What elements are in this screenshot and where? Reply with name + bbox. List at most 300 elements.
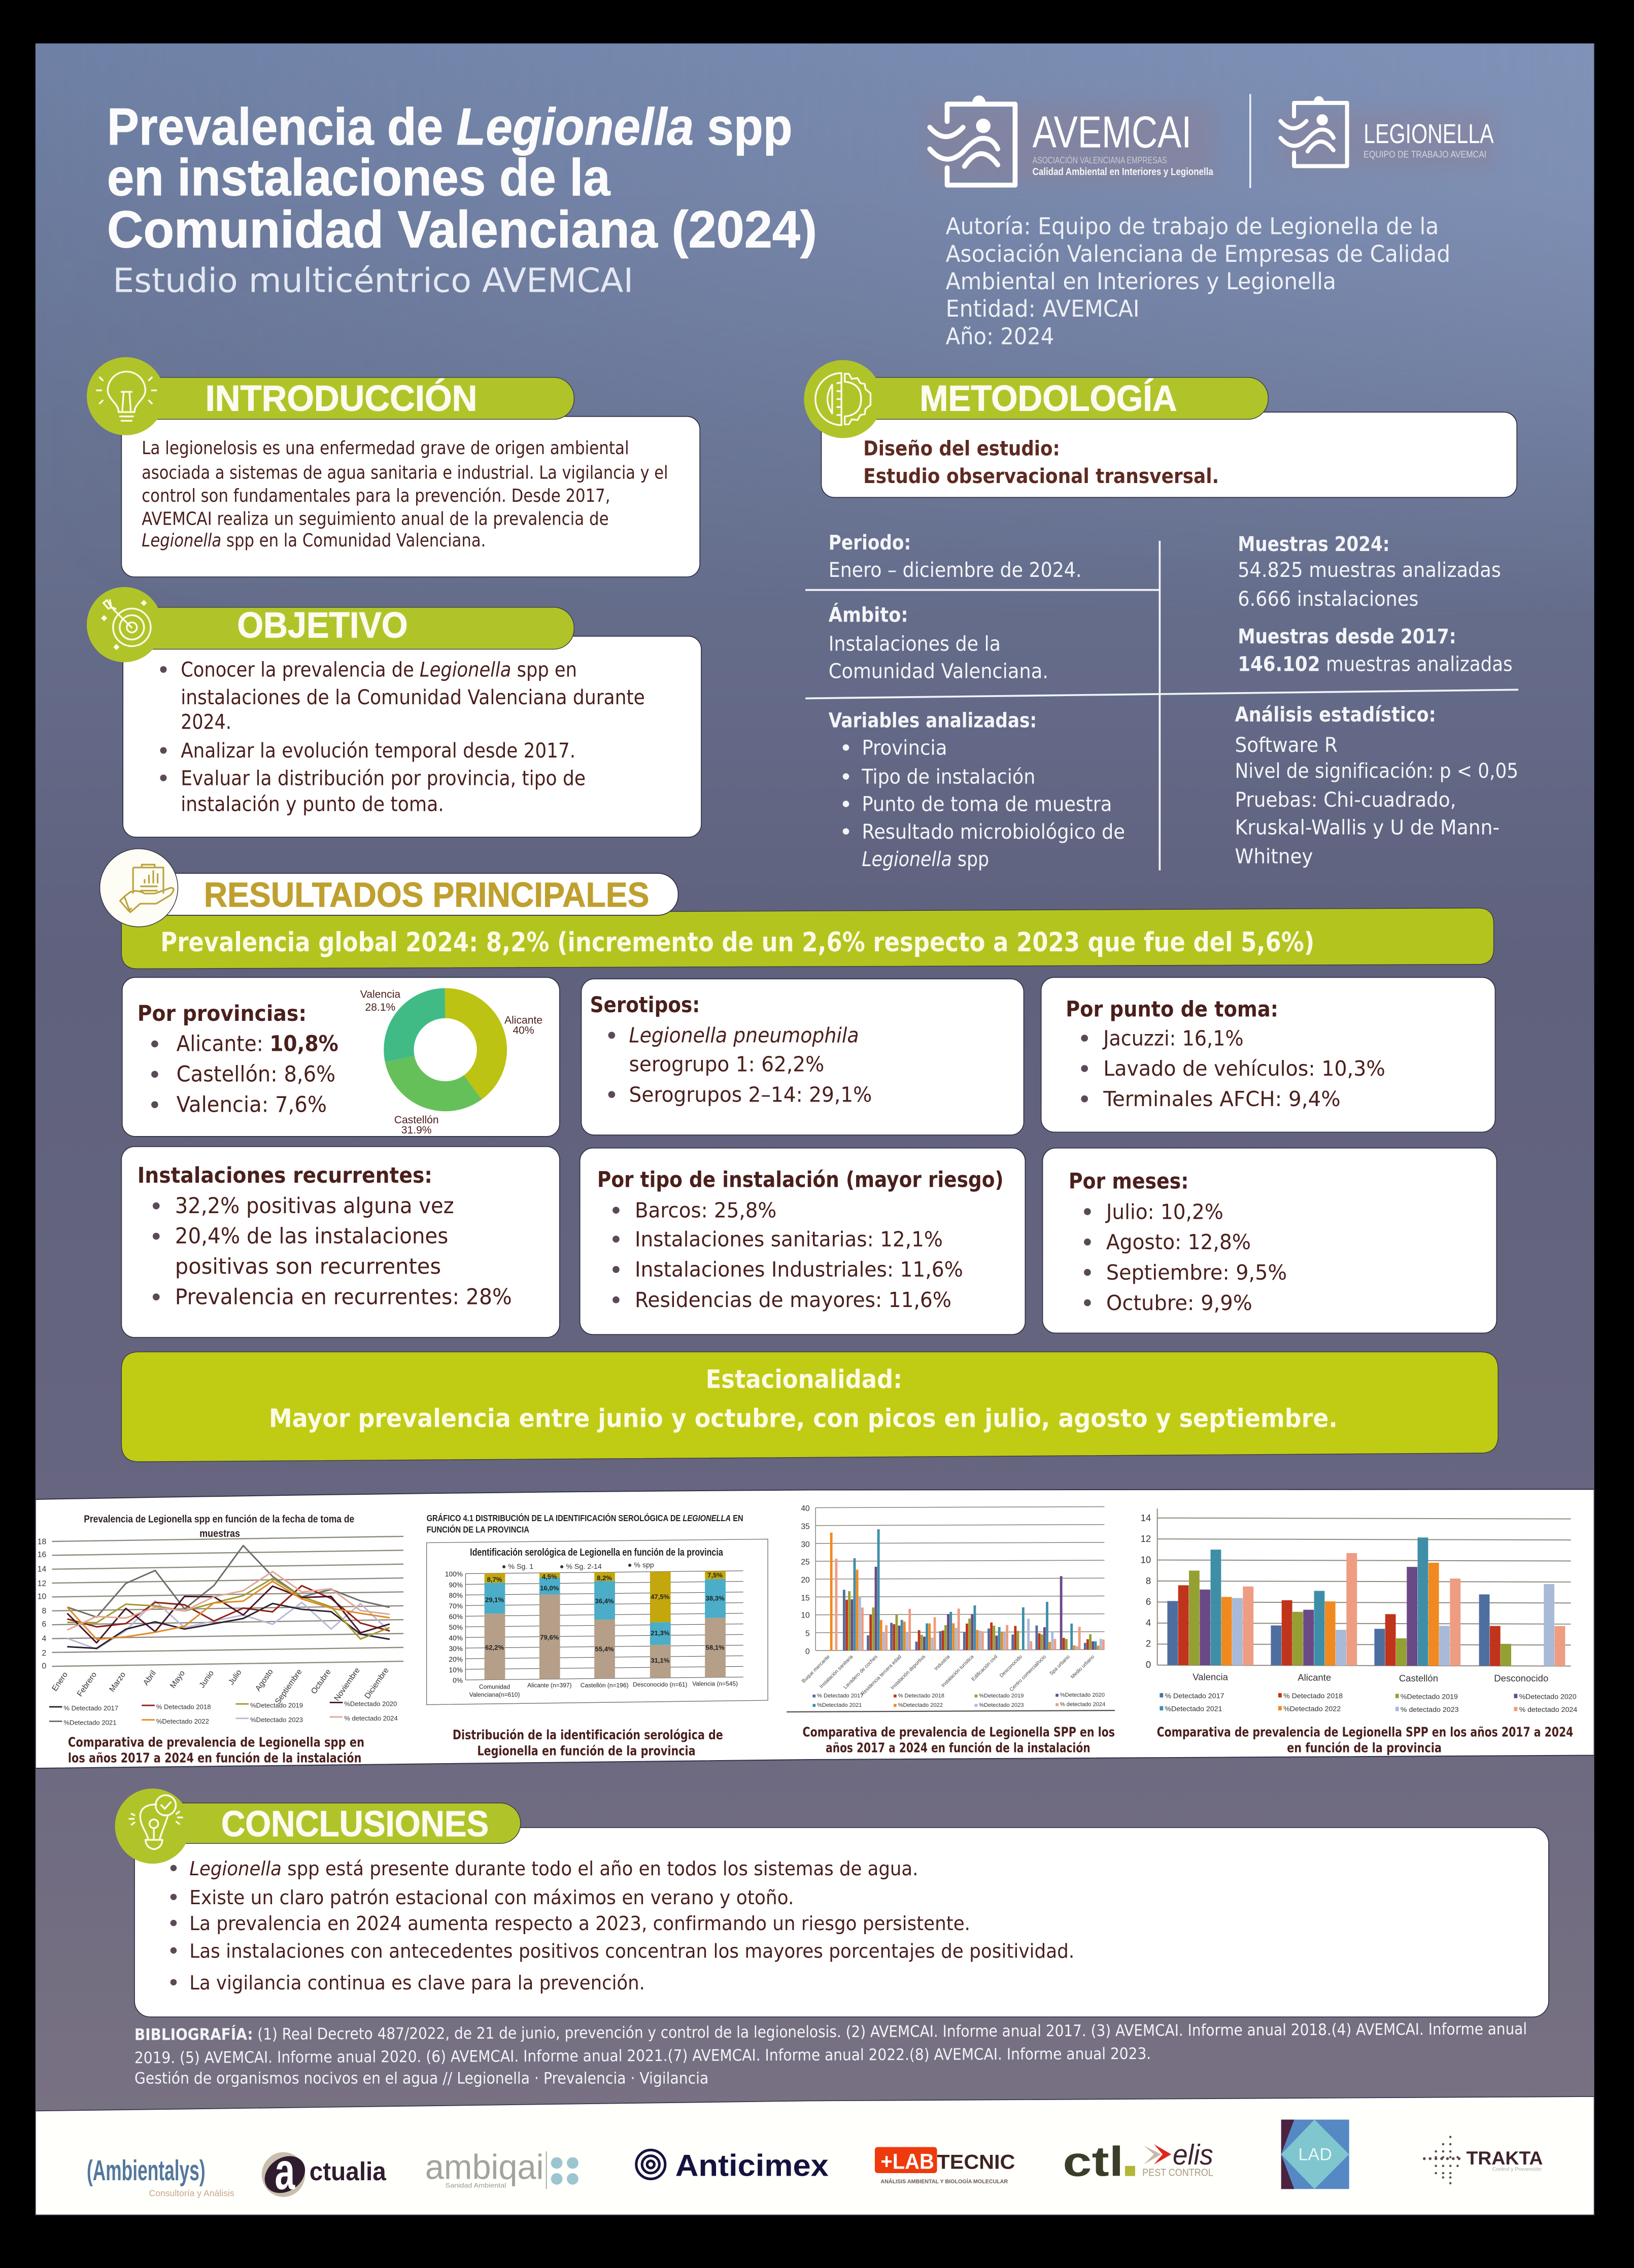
chart 1 axis labels: 12 — [38, 1579, 46, 1588]
chart 1 axis labels: Octubre — [310, 1667, 333, 1696]
chart 3 category labels: Edificación civil — [971, 1654, 999, 1682]
objective heading ribbon — [126, 607, 574, 649]
card: por punto de toma: Lavado de vehículos: 10,3% — [1103, 1056, 1385, 1081]
conclusions list: Las instalaciones con antecedentes positivos concentran los mayores porcentajes de positividad. — [189, 1940, 1074, 1963]
logo: Elis pest control: PEST CONTROL — [1142, 2168, 1213, 2179]
chart 3 category labels: Lavadero de coches — [843, 1654, 879, 1690]
logo: Anticimex: Anticimex — [675, 2149, 829, 2183]
icon: bulb with check — [115, 1789, 190, 1864]
block: ámbito: Comunidad Valenciana. — [829, 660, 1048, 683]
chart 2 value labels: 62,2% — [485, 1643, 504, 1651]
chart 2 axes labels: 80% — [449, 1592, 463, 1599]
chart 2 axes labels: 70% — [449, 1602, 463, 1610]
chart 2 legend: ● % Sg. 2-14 — [560, 1563, 602, 1571]
card: por tipo de instalación: Instalaciones Industriales: 11,6% — [635, 1257, 963, 1282]
chart 1 plot lines — [52, 1536, 403, 1666]
conclusions list: La prevalencia en 2024 aumenta respecto a 2023, confirmando un riesgo persistente. — [189, 1912, 970, 1935]
chart 3 category labels — [801, 1654, 1096, 1697]
chart 2 value labels: 16,0% — [540, 1585, 559, 1592]
objective list — [160, 659, 645, 816]
chart 2 value labels — [485, 1571, 725, 1664]
donut chart: provincias: 28.1% — [365, 1002, 395, 1013]
subtitle: Estudio multicéntrico AVEMCAI — [113, 262, 633, 300]
chart 1 legend: %Detectado 2019 — [250, 1701, 303, 1709]
chart 2 value labels: 58,1% — [706, 1643, 725, 1651]
banner: estacionalidad: Mayor prevalencia entre junio y octubre, con picos en julio, agosto y septiembre. — [269, 1404, 1338, 1433]
chart 1 axis labels: Febrero — [76, 1670, 98, 1698]
chart 1 legend: % detectado 2024 — [344, 1714, 398, 1722]
chart 4 axis labels: 12 — [1141, 1533, 1151, 1544]
logo: Ambientalys: (Ambientalys) — [87, 2154, 206, 2187]
card: por meses: Septiembre: 9,5% — [1106, 1260, 1287, 1285]
card: instalaciones recurrentes: 32,2% positivas alguna vez — [175, 1193, 454, 1219]
logo: AVEMCAI: ASOCIACIÓN VALENCIANA EMPRESAS — [1033, 155, 1167, 165]
chart 4 legend: %Detectado 2021 — [1165, 1705, 1222, 1713]
logo: AVEMCAI: AVEMCAI — [1033, 107, 1192, 157]
chart 1 axis labels: Diciembre — [363, 1666, 391, 1700]
card: por tipo de instalación: Barcos: 25,8% — [635, 1198, 776, 1222]
logo: LAD: LAD — [1298, 2145, 1332, 2164]
block: muestras: 6.666 instalaciones — [1238, 588, 1418, 611]
panel: metodología — [804, 360, 1517, 497]
logo: Elis pest control: elis — [1173, 2139, 1213, 2171]
objective text panel — [123, 636, 701, 837]
chart 3 legend: %Detectado 2022 — [898, 1702, 943, 1708]
card: serotipos: Serogrupos 2–14: 29,1% — [629, 1082, 872, 1107]
block: ámbito: Ámbito: — [829, 603, 908, 627]
chart 3 legend: % Detectado 2017 — [817, 1693, 863, 1699]
logo: AVEMCAI: Calidad Ambiental en Interiores y Legionella — [1033, 166, 1213, 178]
chart 4 axis labels: 10 — [1141, 1554, 1151, 1565]
bar chart: prevalence by province — [1141, 1508, 1577, 1714]
card: serotipos: Serotipos: — [590, 992, 700, 1018]
logo: LabTecnic: TECNIC — [937, 2151, 1015, 2173]
intro paragraph: La legionelosis es una enfermedad grave de origen ambiental — [142, 438, 629, 459]
intro paragraph: asociada a sistemas de agua sanitaria e industrial. La vigilancia y el — [142, 462, 668, 483]
title: Comunidad Valenciana (2024) — [107, 200, 817, 258]
bibliography: Gestión de organismos nocivos en el agua // Legionella · Prevalencia · Vigilancia — [134, 2069, 708, 2087]
donut chart: provincias: Valencia — [360, 988, 400, 1000]
logo: ctl — [1063, 2138, 1135, 2185]
block: análisis estadístico: Pruebas: Chi-cuadrado, — [1235, 788, 1456, 812]
card: instalaciones recurrentes: Instalaciones recurrentes: — [138, 1163, 432, 1188]
block: periodo: Enero – diciembre de 2024. — [829, 559, 1081, 582]
block: variables analizadas: Tipo de instalación — [861, 766, 1035, 789]
logo: Legionella: EQUIPO DE TRABAJO AVEMCAI — [1364, 149, 1486, 160]
card: por provincias: Alicante: 10,8% — [177, 1032, 338, 1057]
chart 1 title: muestras — [199, 1528, 240, 1539]
chart 2 value labels: 38,3% — [706, 1595, 725, 1602]
block: análisis estadístico: Kruskal-Wallis y U de Mann- — [1235, 816, 1500, 839]
chart 4 category labels: Valencia — [1193, 1671, 1229, 1682]
chart 2 axes labels: Alicante (n=397) — [527, 1682, 572, 1689]
banner: prevalencia global: Prevalencia global 2024: 8,2% (incremento de un 2,6% respecto a 2023 que fue del 5,6%) — [160, 927, 1314, 958]
chart 2 value labels: 79,6% — [540, 1633, 559, 1641]
chart 3 legend: % detectado 2024 — [1060, 1702, 1105, 1708]
bibliography — [134, 2019, 1527, 2087]
chart 4 category labels: Alicante — [1298, 1672, 1331, 1683]
logo: Legionella — [1280, 96, 1496, 170]
chart 1 axis labels: 16 — [38, 1551, 46, 1559]
chart 4 legend: %Detectado 2022 — [1283, 1705, 1341, 1713]
chart 3 category labels: Desconocido — [999, 1654, 1024, 1679]
chart 2 value labels: 29,1% — [485, 1596, 504, 1603]
chart 3 axis labels: 30 — [801, 1540, 810, 1549]
chart 3 legend: %Detectado 2023 — [979, 1702, 1024, 1708]
chart 3 category labels: Buque mercante — [801, 1654, 831, 1685]
conclusions list: Existe un claro patrón estacional con máximos en verano y otoño. — [189, 1886, 794, 1909]
panel: objetivo — [87, 587, 701, 837]
block: ámbito: Instalaciones de la — [829, 632, 1001, 656]
study design — [863, 437, 1219, 488]
objective list: instalaciones de la Comunidad Valenciana durante — [181, 686, 645, 709]
chart 2 value labels: 55,4% — [595, 1645, 614, 1653]
chart 2 axes labels: 90% — [449, 1581, 463, 1589]
chart 1 axis labels: Enero — [50, 1670, 70, 1693]
logo: actualia: ctualia — [310, 2157, 386, 2186]
design text panel — [822, 412, 1517, 497]
chart 2 legend — [502, 1561, 654, 1571]
logo: LabTecnic: +LAB — [880, 2149, 934, 2174]
chart 1 axis labels: Agosto — [254, 1667, 275, 1693]
donut chart: provincias — [360, 988, 542, 1136]
chart 4 legend: %Detectado 2020 — [1519, 1693, 1577, 1701]
chart 1 axis labels: 18 — [38, 1537, 46, 1546]
logo: LAD — [1281, 2120, 1349, 2189]
chart 1 axis labels: 0 — [42, 1662, 46, 1670]
block: variables analizadas: Provincia — [862, 737, 947, 760]
white charts band — [36, 1489, 1594, 1768]
chart 3 axis labels: 20 — [801, 1576, 810, 1585]
chart 2 value labels: 8,7% — [487, 1576, 502, 1584]
banner: prevalencia global — [121, 908, 1494, 969]
chart 4 axis labels: 14 — [1141, 1513, 1151, 1523]
chart 1 axis labels: 14 — [38, 1565, 46, 1574]
chart 3 caption: Comparativa de prevalencia de Legionella SPP en los — [803, 1725, 1115, 1740]
logo: Legionella: LEGIONELLA — [1364, 119, 1494, 149]
chart 2 axes labels: Castellón (n=196) — [581, 1682, 628, 1689]
resultados heading — [100, 849, 678, 927]
card: por punto de toma: Jacuzzi: 16,1% — [1102, 1026, 1244, 1050]
title: Prevalencia de Legionella spp — [107, 97, 793, 156]
logo: ambiqai: Sanidad Ambiental — [446, 2181, 506, 2189]
chart 2 heading: GRÁFICO 4.1 DISTRIBUCIÓN DE LA IDENTIFICACIÓN SEROLÓGICA DE LEGIONELLA EN — [427, 1514, 743, 1523]
chart 4 legend: % detectado 2023 — [1401, 1706, 1459, 1714]
chart 2 heading: FUNCIÓN DE LA PROVINCIA — [427, 1525, 529, 1535]
block: análisis estadístico: Software R — [1235, 734, 1338, 757]
intro paragraph: control son fundamentales para la prevención. Desde 2017, — [142, 486, 610, 506]
chart 4 axis labels: 4 — [1146, 1617, 1151, 1628]
chart 3 legend: %Detectado 2020 — [1060, 1692, 1105, 1698]
chart 4 legend — [1160, 1692, 1577, 1714]
chart 2 value labels: 8,2% — [597, 1574, 612, 1582]
chart 3 axis labels — [801, 1504, 810, 1656]
block: ámbito — [829, 603, 1048, 683]
intro text panel — [121, 417, 700, 577]
intro paragraph: AVEMCAI realiza un seguimiento anual de la prevalencia de — [142, 508, 609, 529]
chart 1 title — [84, 1514, 354, 1539]
chart 2 value labels: 36,4% — [595, 1597, 614, 1605]
chart 2 axes labels: 30% — [449, 1645, 463, 1653]
logo: actualia — [258, 2142, 386, 2201]
card: por tipo de instalación: Instalaciones sanitarias: 12,1% — [635, 1227, 943, 1251]
chart 1 axis labels: Marzo — [108, 1670, 127, 1694]
chart 1 axis labels: Noviembre — [332, 1666, 362, 1703]
chart 3 caption: años 2017 a 2024 en función de la instalación — [826, 1741, 1091, 1756]
chart 3 axis labels: 40 — [801, 1504, 810, 1513]
intro heading: INTRODUCCIÓN — [206, 379, 477, 419]
chart 3 category labels: Medio urbano — [1070, 1654, 1096, 1680]
card: por provincias: Castellón: 8,6% — [177, 1062, 335, 1087]
card: por meses: Octubre: 9,9% — [1106, 1291, 1252, 1315]
chart 3 axis labels: 0 — [805, 1647, 810, 1656]
methodology heading: METODOLOGÍA — [920, 379, 1177, 419]
chart 3 legend: % Detectado 2018 — [898, 1693, 944, 1699]
chart 2 frame — [427, 1539, 768, 1705]
chart 1 axis labels: 8 — [42, 1607, 46, 1616]
logo: AVEMCAI — [926, 95, 1215, 185]
block: variables analizadas: Variables analizadas: — [829, 709, 1037, 732]
card: serotipos: Legionella pneumophila — [629, 1023, 859, 1048]
chart 2 value labels: 47,5% — [651, 1593, 670, 1601]
logo: Ambientalys: Consultoría y Análisis — [149, 2189, 234, 2198]
chart 1 axis labels: Junio — [198, 1669, 216, 1690]
authorship block: Ambiental en Interiores y Legionella — [946, 268, 1336, 295]
chart 4 caption: en función de la provincia — [1287, 1741, 1442, 1756]
chart 2 axes labels: 60% — [449, 1613, 463, 1621]
card: por tipo de instalación — [580, 1148, 1025, 1334]
chart 2 axes labels: 20% — [449, 1656, 463, 1663]
donut chart: provincias: 31.9% — [401, 1124, 432, 1136]
icon: gear and brain — [804, 360, 882, 438]
logo: actualia: a — [275, 2142, 295, 2200]
chart 4 category labels: Castellón — [1399, 1673, 1438, 1683]
conclusions list: Legionella spp está presente durante todo el año en todos los sistemas de agua. — [189, 1858, 918, 1880]
chart 4 category labels — [1193, 1671, 1548, 1683]
chart 4 category labels: Desconocido — [1494, 1673, 1548, 1683]
line chart: prevalence by month — [38, 1514, 403, 1727]
chart 2 caption — [453, 1728, 723, 1759]
icon: target — [87, 587, 162, 662]
card: por meses — [1043, 1148, 1496, 1333]
chart 2 legend: ● % spp — [628, 1561, 654, 1569]
block: muestras: Muestras desde 2017: — [1238, 625, 1456, 648]
chart 3 legend: %Detectado 2021 — [817, 1702, 862, 1708]
block: variables analizadas: Resultado microbiológico de — [862, 820, 1125, 844]
block: análisis estadístico — [1235, 703, 1518, 868]
chart 3 axis labels: 5 — [805, 1629, 810, 1638]
chart 3 category labels: Instalación sanitaria — [819, 1654, 855, 1690]
chart 3 category labels: Instalación turística — [940, 1654, 975, 1689]
intro paragraph — [142, 438, 668, 551]
methodology heading ribbon — [843, 377, 1268, 419]
chart 1 title: Prevalencia de Legionella spp en función de la fecha de toma de — [84, 1514, 354, 1525]
logo: Trakta: TRAKTA — [1466, 2147, 1543, 2169]
chart 2 axes labels: 0% — [453, 1677, 463, 1685]
chart 1 axis labels — [38, 1537, 391, 1706]
donut chart: provincias: Castellón — [394, 1114, 439, 1126]
logo: LabTecnic — [875, 2147, 1015, 2185]
authorship block: Autoría: Equipo de trabajo de Legionella de la — [946, 213, 1439, 240]
results heading text: RESULTADOS PRINCIPALES — [204, 876, 649, 914]
chart 2 axes labels: Valencia (n=545) — [692, 1680, 738, 1688]
chart 3 category labels: Industria — [933, 1654, 951, 1672]
block: análisis estadístico: Análisis estadístico: — [1235, 703, 1436, 727]
intro heading ribbon — [126, 377, 574, 419]
chart 2 axes labels: Desconocido (n=61) — [633, 1681, 687, 1688]
study design: Diseño del estudio: — [863, 437, 1060, 461]
bar chart: prevalence by installation — [787, 1504, 1115, 1712]
chart 3 category labels: Spa urbano — [1049, 1654, 1071, 1676]
panel: introducción — [87, 357, 700, 577]
chart 4 legend: % Detectado 2018 — [1283, 1692, 1343, 1700]
title: en instalaciones de la — [107, 148, 610, 207]
block: variables analizadas: Punto de toma de muestra — [862, 793, 1112, 816]
chart 2 axes labels: 50% — [449, 1624, 463, 1631]
card: por provincias: Valencia: 7,6% — [177, 1092, 327, 1117]
methodology grid lines — [805, 541, 1518, 871]
chart 1 axis labels: 6 — [42, 1620, 46, 1629]
chart 3 axis labels: 35 — [801, 1522, 810, 1531]
chart 2 bars — [466, 1571, 743, 1680]
chart 4 axis labels: 2 — [1146, 1638, 1151, 1649]
authorship block: Asociación Valenciana de Empresas de Calidad — [946, 240, 1450, 267]
chart 2 inner title: Identificación serológica de Legionella en función de la provincia — [470, 1547, 724, 1558]
chart 1 legend: % Detectado 2018 — [156, 1703, 211, 1710]
chart 1 axis labels: Julio — [227, 1668, 244, 1687]
chart 3 axis labels: 15 — [801, 1594, 810, 1603]
conclusions list: La vigilancia continua es clave para la prevención. — [189, 1972, 645, 1995]
block: variables analizadas — [829, 709, 1125, 871]
chart 4 legend: %Detectado 2019 — [1401, 1693, 1458, 1701]
icon: clipboard in hand — [100, 849, 178, 927]
chart 4 axis labels: 6 — [1146, 1596, 1151, 1607]
bibliography: 2019. (5) AVEMCAI. Informe anual 2020. (6) AVEMCAI. Informe anual 2021.(7) AVEMCAI. Informe anual 2022.(8) AVEMCAI. Informe anual 2023. — [134, 2045, 1151, 2067]
block: muestras: 146.102 muestras analizadas — [1238, 652, 1513, 676]
card: por meses: Agosto: 12,8% — [1106, 1230, 1251, 1254]
chart 3 axis labels: 25 — [801, 1558, 810, 1566]
chart 1 legend: % Detectado 2017 — [63, 1704, 118, 1712]
chart 2 axes labels: Valenciana(n=610) — [469, 1691, 520, 1698]
chart 2 axes labels — [445, 1570, 738, 1698]
card: serotipos — [582, 979, 1024, 1135]
title — [107, 97, 817, 258]
logo: ctl: ctl — [1063, 2138, 1124, 2185]
chart 3 category labels: Centro comercial/ocio — [1009, 1654, 1047, 1693]
card: por provincias — [122, 977, 560, 1137]
conclusions heading ribbon — [155, 1803, 521, 1843]
chart 1 legend: %Detectado 2020 — [344, 1700, 397, 1708]
block: muestras: Muestras 2024: — [1238, 533, 1389, 556]
stacked bar chart: serología — [427, 1514, 768, 1705]
card: por tipo de instalación: Residencias de mayores: 11,6% — [635, 1288, 951, 1312]
logo: LabTecnic: ANÁLISIS AMBIENTAL Y BIOLOGÍA MOLECULAR — [880, 2178, 1008, 2185]
chart 2 value labels: 31,1% — [651, 1657, 670, 1664]
donut chart: provincias: Alicante — [504, 1015, 542, 1026]
block: variables analizadas: Legionella spp — [862, 848, 989, 871]
block: análisis estadístico: Nivel de significación: p < 0,05 — [1235, 760, 1518, 783]
chart 2 caption: Legionella en función de la provincia — [477, 1743, 696, 1759]
chart 1 legend: %Detectado 2023 — [250, 1716, 303, 1724]
logo: Trakta — [1423, 2136, 1543, 2184]
chart 3 category labels: Residencia tercera edad — [860, 1654, 903, 1697]
banner: estacionalidad: Estacionalidad: — [706, 1365, 902, 1394]
chart 1 legend: %Detectado 2022 — [156, 1717, 209, 1725]
chart 3 legend: %Detectado 2019 — [979, 1693, 1024, 1699]
study design: Estudio observacional transversal. — [863, 465, 1219, 488]
chart 4 legend: % detectado 2024 — [1519, 1706, 1577, 1714]
chart 1 legend — [49, 1700, 398, 1727]
objective list: Conocer la prevalencia de Legionella spp en — [181, 659, 577, 682]
card: por punto de toma: Terminales AFCH: 9,4% — [1103, 1087, 1341, 1111]
chart 2 axes labels: 10% — [449, 1666, 463, 1674]
donut chart: provincias: 40% — [513, 1025, 534, 1037]
chart 2 legend: ● % Sg. 1 — [502, 1563, 533, 1571]
intro paragraph: Legionella spp en la Comunidad Valenciana. — [142, 530, 486, 551]
chart 2 axes labels: 40% — [449, 1634, 463, 1642]
chart 1 axis labels: Septiembre — [274, 1667, 304, 1706]
chart 4 axis labels: 0 — [1146, 1659, 1151, 1670]
icon: light bulb — [87, 357, 165, 435]
block: periodo — [829, 531, 1081, 582]
conclusions list — [171, 1858, 1074, 1995]
sponsors band — [36, 2097, 1594, 2215]
chart 1 axis labels: Abril — [142, 1669, 158, 1687]
chart 4 legend: % Detectado 2017 — [1165, 1692, 1224, 1700]
card: por punto de toma — [1041, 977, 1495, 1132]
chart 2 value labels: 7,5% — [707, 1571, 723, 1579]
conclusions heading: CONCLUSIONES — [221, 1804, 489, 1844]
chart 3 grid and bars — [815, 1507, 1105, 1651]
block: muestras — [1238, 533, 1513, 676]
logo: ambiqai: ambiqai — [425, 2148, 543, 2186]
block: periodo: Periodo: — [829, 531, 911, 555]
chart 1 caption: los años 2017 a 2024 en función de la instalación — [68, 1751, 361, 1766]
block: análisis estadístico: Whitney — [1235, 845, 1313, 868]
logo: Trakta: Control y Prevención — [1492, 2167, 1542, 2173]
chart 1 axis labels: 2 — [42, 1649, 46, 1658]
card: por meses: Por meses: — [1069, 1169, 1188, 1194]
chart 3 axis labels: 10 — [801, 1611, 810, 1620]
block: muestras: 54.825 muestras analizadas — [1238, 559, 1501, 582]
chart 2 caption: Distribución de la identificación serológica de — [453, 1728, 723, 1743]
chart 4 caption — [1157, 1725, 1573, 1756]
objective list: Analizar la evolución temporal desde 2017. — [181, 739, 575, 763]
chart 1 axis labels: Mayo — [168, 1669, 187, 1690]
divider between logos — [1249, 94, 1251, 188]
chart 1 caption — [68, 1735, 364, 1766]
card: por meses: Julio: 10,2% — [1105, 1199, 1223, 1224]
card: instalaciones recurrentes: 20,4% de las instalaciones — [175, 1224, 448, 1249]
authorship block: Entidad: AVEMCAI — [946, 295, 1139, 322]
objective list: 2024. — [181, 710, 231, 734]
chart 4 axis labels: 8 — [1146, 1575, 1151, 1586]
chart 3 legend — [812, 1692, 1105, 1708]
banner: estacionalidad — [121, 1352, 1498, 1462]
card: instalaciones recurrentes: Prevalencia en recurrentes: 28% — [175, 1284, 512, 1310]
chart 3 caption — [803, 1725, 1115, 1756]
chart 4 grid and bars — [1158, 1508, 1571, 1666]
chart 2 axes labels: Comunidad — [479, 1683, 510, 1690]
authorship block: Año: 2024 — [946, 323, 1054, 350]
chart 2 value labels: 21,3% — [651, 1629, 670, 1637]
objective list: Evaluar la distribución por provincia, tipo de — [181, 767, 586, 790]
objective list: instalación y punto de toma. — [181, 793, 444, 816]
chart 2 value labels: 4,5% — [542, 1573, 557, 1580]
card: por provincias: Por provincias: — [138, 1001, 307, 1026]
chart 1 caption: Comparativa de prevalencia de Legionella spp en — [68, 1735, 364, 1750]
card: instalaciones recurrentes: positivas son recurrentes — [175, 1254, 441, 1280]
